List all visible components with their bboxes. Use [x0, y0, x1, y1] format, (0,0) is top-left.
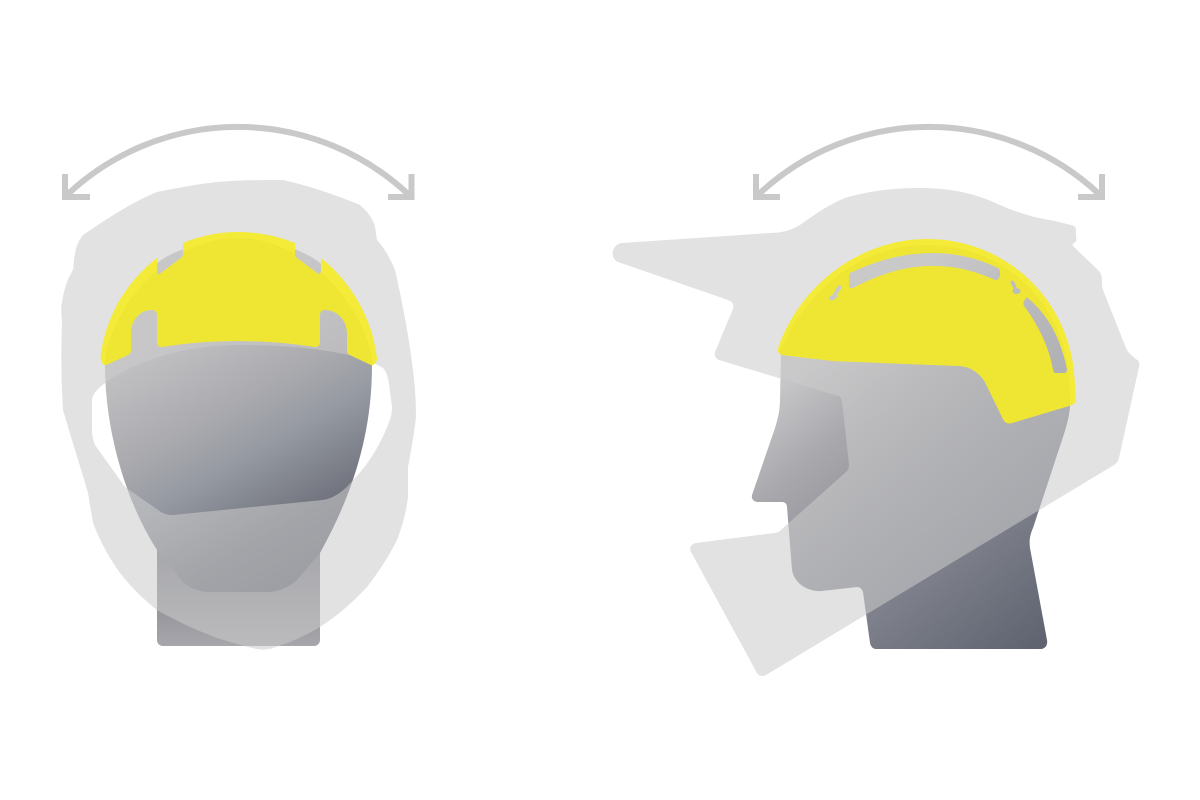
head: side view — [752, 248, 1070, 649]
face: front view — [105, 240, 372, 592]
yellow inner liner: front view — [100, 232, 377, 365]
rotation arrow: front view — [65, 127, 412, 197]
translucent helmet shell: front view — [61, 180, 416, 650]
front view: head and helmet — [61, 127, 416, 650]
side view: head and helmet — [613, 127, 1139, 676]
yellow inner liner with vents: side view — [778, 239, 1076, 423]
neck: front view — [157, 540, 320, 646]
rotation arrow: side view — [756, 127, 1102, 197]
translucent full-face helmet shell: side view — [613, 188, 1139, 676]
